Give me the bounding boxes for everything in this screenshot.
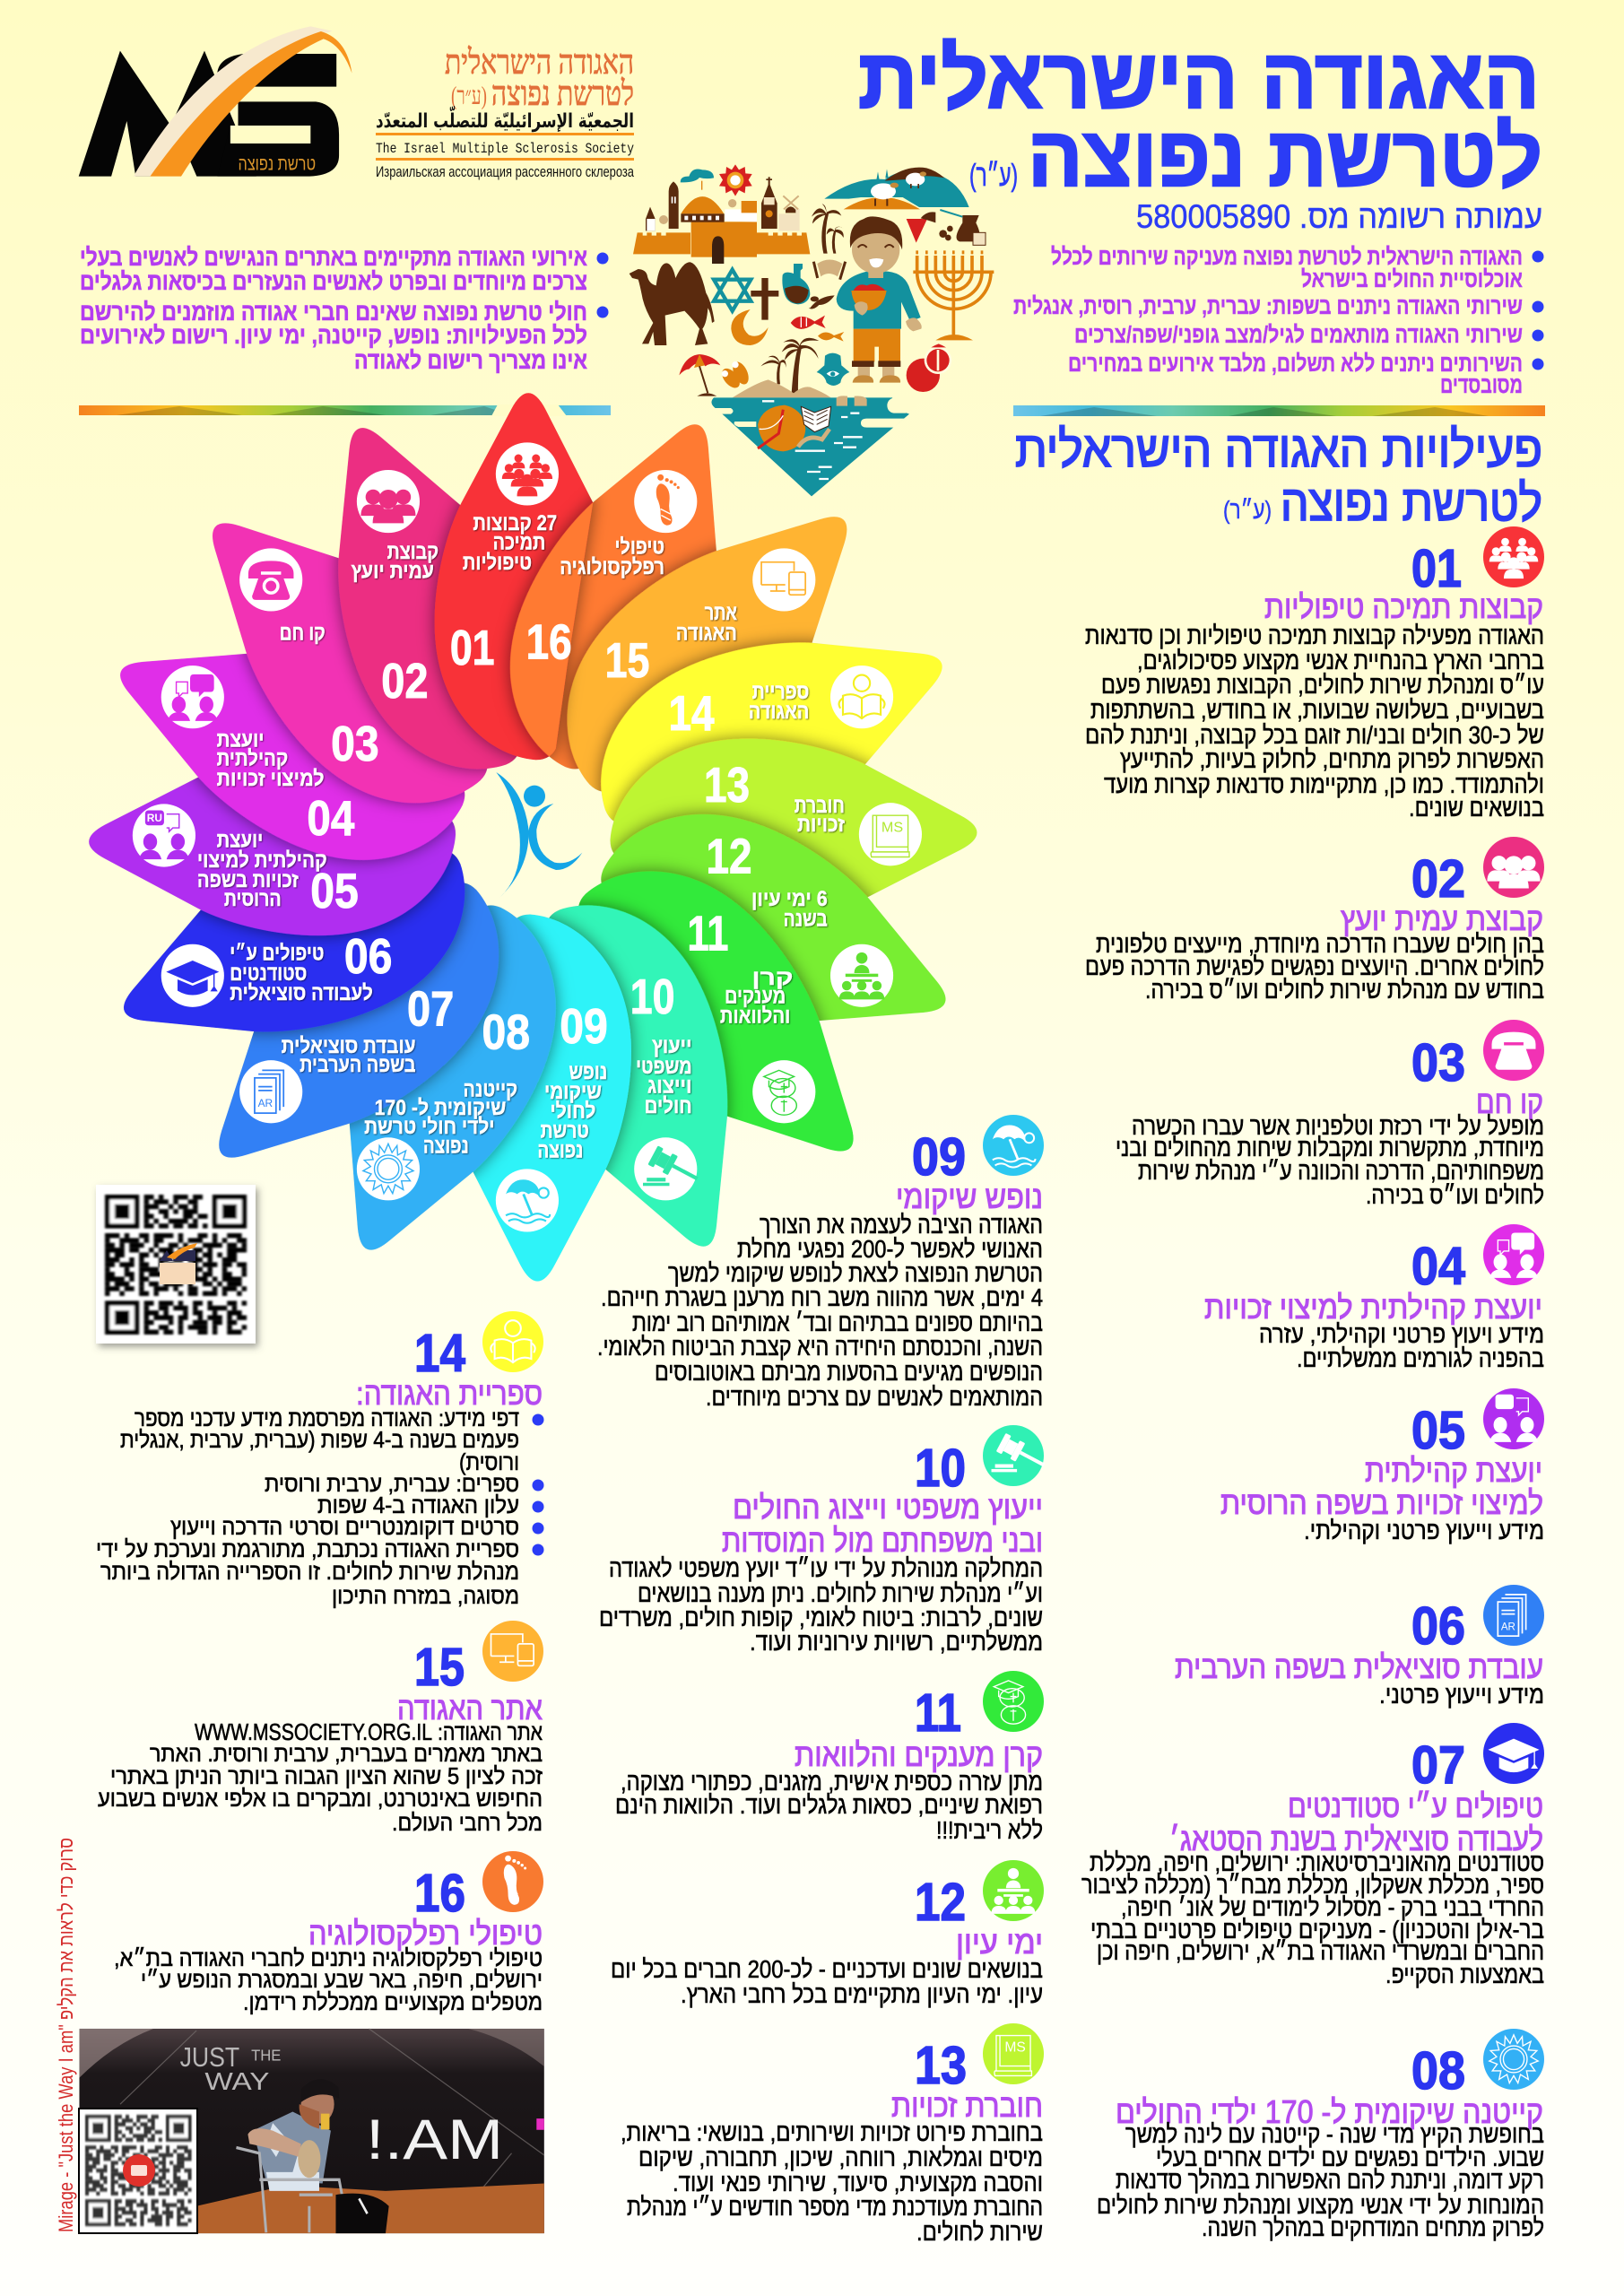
petal numbers: 02 [381, 653, 429, 709]
item 10 [599, 1425, 1049, 1656]
petal labels: מענקים [725, 984, 786, 1007]
text 15: באתר מאמרים בעברית, ערבית ורוסית. האתר [150, 1740, 543, 1767]
text 03 [1116, 1112, 1544, 1209]
activities heading: (ע״ר) [1223, 496, 1272, 524]
heading 08: קייטנה שיקומית ל- 170 ילדי החולים [1116, 2093, 1543, 2130]
text 13: והסבה מקצועית, סיעוד, שירותי פנאי ועוד. [673, 2169, 1043, 2196]
text 09: השנה, והכנסתם היחידה היא קצבת הביטוח הלאומי. [597, 1333, 1043, 1361]
petal labels: חולים [645, 1094, 692, 1118]
petal numbers: 06 [344, 928, 392, 984]
left intro bullets [80, 244, 608, 374]
number 15: 15 [414, 1638, 465, 1697]
MS logo: טרשת נפוצה [239, 154, 316, 174]
item 02 [1085, 837, 1544, 1004]
text 07: סטודנטים מהאוניברסיטאות: ירושלים, חיפה, מכללת [1090, 1848, 1544, 1876]
petal numbers: 03 [331, 716, 379, 771]
item 03 [1116, 1020, 1544, 1209]
petal labels: עובדת סוציאלית [282, 1034, 416, 1057]
text 10: ממשלתיים, רשויות עירוניות ועוד. [750, 1628, 1043, 1656]
petal numbers: 13 [704, 757, 750, 813]
petal labels: טיפוליות [463, 551, 532, 574]
activities heading [1015, 421, 1542, 531]
petal numbers: 05 [310, 863, 359, 918]
text 03: לחולים ועו״ס בכירה. [1366, 1181, 1544, 1209]
number 04: 04 [1411, 1237, 1465, 1296]
QR code: society [96, 1185, 256, 1344]
petal 11 [575, 860, 854, 1152]
photo text: JUST [180, 2042, 239, 2073]
text 02: בחודש עם מנהלת שירות לחולים ועו״ס בכירה. [1145, 976, 1544, 1004]
heading 06: עובדת סוציאלית בשפה הערבית [1175, 1648, 1543, 1685]
petal numbers: 08 [482, 1004, 530, 1059]
text 08: בחופשת הקיץ מדי שנה - קייטנה עם לינה למשך [1125, 2120, 1544, 2148]
petal labels: קהילתית למיצוי [197, 848, 327, 872]
heading 01: קבוצות תמיכה טיפוליות [1264, 588, 1543, 625]
heading 16: טיפולי רפלקסולוגיה [308, 1915, 543, 1952]
petal labels: טיפולים ע״י [230, 942, 324, 965]
number 03: 03 [1411, 1033, 1465, 1092]
text 09: האגודה הציבה לעצמה את הצורך [760, 1211, 1043, 1239]
wheelchair user [236, 2079, 389, 2233]
text 09: המותאמים לאנשים עם צרכים מיוחדים. [706, 1383, 1043, 1411]
text 09: הנופשים מגיעים בהסעות מביתם באוטובוסים [655, 1358, 1043, 1386]
icon: star, cross, crescent [714, 270, 778, 345]
text 16: מטפלים מקצועיים ממכללת רידמן. [243, 1988, 543, 2015]
heading 07: לעבודה סוציאלית בשנת הסטאג׳ [1169, 1821, 1543, 1857]
petal 13 [610, 739, 977, 897]
number 09: 09 [912, 1127, 966, 1187]
title: האגודה הישראלית [858, 31, 1540, 126]
icon: seminar [983, 1860, 1044, 1921]
text 02 [1085, 930, 1544, 1004]
number 07: 07 [1411, 1735, 1465, 1795]
heading 05 [1220, 1452, 1543, 1521]
petal 07 [177, 849, 548, 1221]
petal 12 [597, 803, 946, 1026]
left rainbow bar [79, 404, 611, 416]
photo text: THE [251, 2047, 281, 2065]
petal numbers: 10 [630, 969, 674, 1024]
icon: documents AR [1483, 1585, 1544, 1646]
title [858, 31, 1542, 204]
right intro bullets: שירותי האגודה מותאמים לגיל/מצב גופני/שפה/צרכים [1074, 321, 1523, 348]
icon: grapes and coffee [907, 210, 986, 245]
heading 10: ייעוץ משפטי וייצוג החולים [733, 1489, 1043, 1526]
petal labels: עמית יועץ [351, 560, 434, 583]
text 01: בנושאים שונים. [1409, 794, 1544, 822]
petal labels: נפוצה [537, 1139, 583, 1162]
heading 03: קו חם [1476, 1083, 1543, 1120]
text 04 [1259, 1320, 1544, 1372]
list 14: סרטים דוקומנטריים וסרטי הדרכה וייעוץ [170, 1513, 519, 1540]
photo text: WAY [204, 2067, 269, 2096]
petal numbers [307, 613, 752, 1059]
icon: hills and sheep [824, 168, 969, 209]
petal labels: האגודה [749, 700, 809, 723]
icon: sun and cloud [681, 164, 752, 196]
icon: sun [1483, 2029, 1544, 2090]
heading 09: נופש שיקומי [896, 1178, 1043, 1215]
icon: graduation cap [1483, 1723, 1544, 1784]
text 01: ולהתמודד. כמו כן, מתקיימות סדנאות קצרות מועד [1104, 770, 1544, 798]
petal labels: טיפולי [615, 535, 664, 559]
text 02: לחולים אחרים. היועצים נפגשים לפגישת הדרכה פעם [1085, 952, 1544, 980]
icon: foot [482, 1851, 543, 1912]
text 15 [98, 1718, 543, 1836]
petal labels: ילדי חולי טרשת [364, 1115, 495, 1138]
list 14 [96, 1405, 543, 1609]
petal numbers: 09 [560, 998, 608, 1054]
text 01: עו״ס ומנהלת שירות לחולים, הקבוצות נפגשות פעם [1101, 671, 1544, 699]
text 03: מיוחדת, מתקשרות ומקבלות שיחות מהחולים ובני [1116, 1134, 1544, 1161]
petal 14 [590, 631, 942, 827]
petal 10 [544, 894, 739, 1247]
number 06: 06 [1411, 1596, 1465, 1656]
petal labels: לעבודה סוציאלית [230, 981, 373, 1004]
petal 06 [100, 812, 499, 1098]
item 07 [1081, 1723, 1544, 1988]
petal labels: תמיכה [493, 531, 545, 554]
icon: scholarship dollar [983, 1671, 1044, 1732]
text 01: האפשרות לפרוק מתחים, לחלוק בעיות, להתייעץ [1120, 745, 1544, 773]
right intro bullets [1013, 243, 1544, 398]
text 05: מידע וייעוץ פרטני וקהילתי. [1304, 1517, 1544, 1544]
number 14: 14 [414, 1324, 465, 1383]
registration number: עמותה רשומה מס. 580005890 [1136, 198, 1542, 235]
petal labels: אתר [705, 601, 737, 624]
petal labels: בשנה [784, 907, 828, 930]
number 01: 01 [1411, 539, 1462, 598]
petal icons [133, 442, 922, 1232]
text 02: בהן חולים שעברו הדרכה מיוחדת, מייעצים טלפונית [1096, 930, 1544, 958]
logo wordmark: האגודה הישראלית [445, 44, 634, 82]
icon: pomegranate [907, 344, 951, 392]
activities heading: פעילויות האגודה הישראלית [1015, 421, 1542, 477]
text 10: וע״י מנהלת שירות לחולים. ניתן מענה בנושאים [638, 1579, 1043, 1607]
list 14: ספריית האגודה נכתבת, מתורגמת ונערכת על ידי [96, 1535, 519, 1562]
text 08: המונחות על ידי אנשי מקצוע ומנהלת שירות לחולים [1097, 2191, 1544, 2219]
text 15: מכל רחבי העולם. [392, 1809, 543, 1836]
item 13 [621, 2023, 1044, 2246]
number 08: 08 [1411, 2041, 1465, 2100]
icon: center person logo [496, 772, 582, 898]
text 13: בחוברת פירוט זכויות ושירותים, בנושאי: בריאות, [621, 2118, 1043, 2146]
petal 02 [272, 404, 559, 804]
left intro bullets: צרכים מיוחדים ובפרט לאנשים הנעזרים בכיסאות גלגלים [80, 268, 587, 295]
text 11: ללא ריבית!!! [936, 1816, 1043, 1844]
icon: beach [983, 1115, 1044, 1176]
icon: menorah [913, 250, 994, 340]
petal 09 [473, 915, 631, 1282]
petal labels: הרוסית [224, 887, 282, 910]
text 09: האנושי לאפשר ל-200 נפגעי מחלת [737, 1235, 1043, 1263]
text 13: שירות לחולים. [916, 2218, 1043, 2246]
petal 15 [558, 517, 847, 796]
icon: phone [1483, 1020, 1544, 1081]
text 08: שבוע. הילדים נפגשים עם ילדים אחרים בעלי [1156, 2144, 1544, 2171]
item 16 [114, 1851, 543, 2015]
icon: camel [630, 262, 715, 345]
petal labels: והלוואות [720, 1004, 790, 1028]
text 13: מיסים וגמלאות, רווחה, שיכון, תחבורה, שיקום [638, 2144, 1043, 2171]
number 13: 13 [915, 2036, 967, 2095]
heading 07 [1169, 1787, 1543, 1857]
petal labels: קייטנה [463, 1077, 517, 1100]
list 14: ורוסית) [459, 1448, 519, 1475]
text 07 [1081, 1848, 1544, 1988]
left intro bullets: חולי טרשת נפוצה שאינם חברי אגודה מוזמנים להירשם [80, 299, 587, 326]
petal labels: בשפה הערבית [300, 1053, 416, 1076]
heading 07: טיפולים ע״י סטודנטים [1288, 1787, 1543, 1824]
left intro bullets: אינו מצריך רישום לאגודה [354, 347, 587, 374]
text 16: טיפולי רפלקסולוגיה ניתנים לחברי האגודה בת״א, [114, 1944, 543, 1971]
petal labels: האגודה [676, 621, 737, 644]
petal numbers: 11 [688, 906, 728, 961]
heading 13: חוברת זכויות [891, 2087, 1043, 2124]
item 15 [98, 1621, 543, 1836]
text 09: 4 ימים, אשר מהווה משב רוח מרענן בשגרת חייהם. [601, 1283, 1043, 1311]
petal labels: למיצוי זכויות [217, 767, 324, 790]
heading 10: ובני משפחתם מול המוסדות [722, 1522, 1043, 1559]
list 14: דפי מידע: האגודה מפרסמת מידע עדכני מספר [135, 1405, 519, 1431]
icon: boy with basket [837, 216, 922, 383]
petal numbers: 01 [450, 620, 495, 675]
logo wordmark: לטרשת נפוצה [491, 75, 634, 113]
right intro bullets: האגודה הישראלית לטרשת נפוצה מעניקה שירותים לכלל [1051, 243, 1523, 270]
text 10 [599, 1554, 1043, 1656]
text 12: בנושאים שונים ועדכניים - לכ-200 חברים בכל יום [611, 1955, 1043, 1983]
heading 14: ספריית האגודה: [356, 1375, 543, 1412]
petal 05 [89, 777, 456, 935]
icon: sea with reader [711, 379, 924, 496]
text 03: מופעל על ידי רכזת וטלפניות אשר עברו הכשרה [1132, 1112, 1544, 1140]
petals [85, 389, 981, 1285]
list 14: פעמים בשנה ב-4 שפות (עברית, ערבית ,אנגלית [120, 1426, 519, 1453]
list 14: עלון האגודה ב-4 שפות [317, 1492, 519, 1518]
logo wordmark: (ע״ר) [451, 83, 487, 110]
icon: reader [482, 1311, 543, 1372]
heading 04: יועצת קהילתית למיצוי זכויות [1204, 1289, 1542, 1326]
text 01: של כ-30 חולים ובני/ות זוגם בכל קבוצה, וניתנת להם [1085, 721, 1544, 749]
title: לטרשת נפוצה [1028, 109, 1542, 204]
icon: gavel [983, 1425, 1049, 1486]
activities heading: לטרשת נפוצה [1281, 474, 1542, 531]
text 10: שונים, לרבות: ביטוח לאומי, קופות חולים, משרדים [599, 1604, 1043, 1631]
text 01: האגודה מפעילה קבוצות תמיכה טיפוליות וכן סדנאות [1085, 622, 1544, 649]
icon: umbrella and sandals [679, 354, 751, 396]
petal labels: ספריית [752, 680, 809, 703]
item 09 [597, 1115, 1044, 1411]
heading 05: למיצוי זכויות בשפה הרוסית [1220, 1484, 1543, 1521]
illustration: heart of Israel icons [630, 164, 994, 496]
right intro bullets: השירותים ניתנים ללא תשלום, מלבד אירועים במחירים [1068, 350, 1523, 377]
right intro bullets: שירותי האגודה ניתנים בשפות: עברית, ערבית, רוסית, אנגלית [1013, 292, 1523, 319]
vertical scan caption: סרוק כדי לראות את הקליפ ‎Mirage - "Just the Way I am"‎ [55, 1838, 77, 2232]
list 14: ספרים: עברית, ערבית ורוסית [265, 1470, 519, 1497]
number 12: 12 [915, 1873, 966, 1932]
icon: hamsa [817, 353, 849, 386]
petal labels: רפלקסולוגיה [560, 555, 664, 578]
petal labels: חוברת [795, 794, 845, 817]
petal labels: קהילתית [217, 747, 288, 770]
petal labels: שיקומית ל- 170 [375, 1096, 506, 1119]
text 04: מידע ויעוץ פרטני וקהילתי, עזרה [1259, 1320, 1544, 1348]
petal labels: לחולי [550, 1100, 595, 1123]
item 06 [1175, 1585, 1544, 1709]
petal numbers: 14 [668, 685, 715, 741]
petal labels: משפטי [636, 1055, 692, 1078]
icon: jug, scroll, olive, fish [782, 259, 846, 342]
number 16: 16 [414, 1864, 465, 1923]
petal numbers: 15 [605, 632, 649, 688]
text 01: בשבועיים, בשלושה שבועות, או בחודש, בהשתתפות [1090, 696, 1544, 724]
icon: rights booklet [983, 2023, 1044, 2084]
item 08 [1097, 2029, 1544, 2241]
petal labels: קבוצת [387, 540, 439, 563]
text 12 [611, 1955, 1043, 2008]
heading 12: ימי עיון [956, 1924, 1043, 1961]
text 08: רקע דומה, וניתנת להם האפשרות במהלך סדנאות [1116, 2166, 1544, 2194]
petal labels: שיקומי [544, 1080, 602, 1103]
petal labels: ייעוץ [652, 1034, 692, 1057]
list 14: מסוגה, במזרח התיכון [332, 1582, 519, 1609]
QR code: clip [79, 2109, 197, 2233]
text 10: המחלקה מנוהלת על ידי עו״ד יועץ משפטי לאגודה [609, 1554, 1043, 1582]
icon: people [1483, 837, 1544, 898]
text 08: לפרוק מתחים המודחקים במהלך השנה. [1202, 2213, 1544, 2241]
photo text: !.AM [366, 2108, 503, 2171]
clip photo [79, 2029, 544, 2233]
petal numbers: 12 [707, 829, 752, 884]
petal 01 [435, 393, 593, 760]
petal labels: יועצת [217, 728, 265, 752]
heading 10 [722, 1489, 1043, 1559]
logo wordmark [376, 44, 634, 180]
text 06: מידע וייעוץ פרטני. [1379, 1681, 1544, 1709]
petal labels: נפוצה [423, 1134, 469, 1157]
logo wordmark: الجمعيّة الإسرائيليّة للتصلّب المتعدّد [376, 106, 634, 133]
text 11: רפואת שיניים, כסאות גלגלים ועוד. הלוואות הינם [615, 1791, 1043, 1819]
petal 16 [543, 424, 721, 773]
text 12: עיון. ימי העיון מתקיימים בכל רחבי הארץ. [681, 1980, 1043, 2008]
text 09: בהיותם ספונים בבתיהם ובד׳ אמותיהם רוב ימות [632, 1309, 1043, 1336]
heading 15: אתר האגודה [397, 1690, 543, 1726]
text 15: אתר האגודה: WWW.MSSOCIETY.ORG.IL [195, 1718, 543, 1745]
text 13: החוברת מעודכנת מדי מספר חודשים ע״י מנהלת [627, 2193, 1043, 2221]
text 09: הטרשת הנפוצה לצאת לנופש שיקומי למשך [668, 1259, 1043, 1287]
logo wordmark: The Israel Multiple Sclerosis Society [376, 141, 634, 157]
petal labels: זכויות בשפה [197, 868, 299, 891]
icon: devices [482, 1621, 543, 1682]
petal labels: 27 קבוצות [473, 511, 557, 535]
icon: chat [1483, 1224, 1544, 1285]
number 05: 05 [1411, 1401, 1465, 1460]
petal numbers: 16 [526, 613, 572, 669]
text 15: זכה לציון 5 שהוא הציון הגבוה ביותר הניתן באתרי [110, 1762, 543, 1789]
petal labels: נופש [569, 1060, 607, 1083]
flower diagram [85, 389, 981, 1285]
title: (ע״ר) [969, 159, 1018, 193]
text 16 [114, 1944, 543, 2015]
text 07: באמצעות הסקייפ. [1385, 1961, 1544, 1988]
text 11 [615, 1768, 1043, 1844]
photo text [180, 2042, 503, 2171]
petal labels [197, 511, 845, 1162]
icon: palm trees [760, 204, 845, 393]
icon: groups [1483, 526, 1544, 587]
icon: old city [633, 177, 810, 264]
text 11: מתן עזרה כספית אישית, מזגנים, כפתורי מצוקה, [621, 1768, 1043, 1796]
text 01: ברחבי הארץ בהנחיית אנשי מקצוע פסיכולוגים, [1137, 647, 1544, 674]
text 15: החיפוש באינטרנט, ומבקרים בו אלפי אנשים בשבוע [98, 1785, 543, 1812]
petal 04 [85, 612, 484, 899]
petal labels: קו חם [280, 621, 326, 644]
text 07: החרדי בבני ברק - מסלול לימודים של אונ׳ חיפה, [1121, 1893, 1544, 1921]
item 14 [96, 1311, 543, 1609]
petal 03 [150, 481, 521, 852]
text 03: משפחותיהם, הדרכה והכוונה ע״י מנהלת שירות [1138, 1157, 1544, 1185]
petal numbers: 04 [307, 790, 355, 846]
icon: RU chat [1483, 1388, 1544, 1449]
petal labels: זכויות [797, 813, 845, 836]
text 01 [1085, 622, 1544, 822]
petal labels: יועצת [217, 828, 263, 851]
item 12 [611, 1860, 1044, 2008]
list 14: מנהלת שירות לחולים. זו הספרייה הגדולה ביותר [100, 1558, 519, 1585]
petal labels: טרשת [541, 1118, 589, 1142]
logo wordmark: Израильская ассоциация рассеянного склероза [376, 163, 634, 180]
right intro bullets: אוכלוסיית החולים בישראל [1301, 265, 1523, 292]
text 07: החברים ובמשרדי האגודה בת״א, ירושלים, חיפה וכן [1097, 1937, 1544, 1965]
text 04: בהפניה לגורמים ממשלתיים. [1297, 1344, 1544, 1372]
text 07: בר-אילן והטכניון) - מעניקים טיפולים פרטניים בבתי [1090, 1916, 1544, 1944]
text 13 [621, 2118, 1043, 2246]
petal numbers: 07 [407, 980, 454, 1036]
MS logo [79, 26, 352, 177]
petal 08 [344, 902, 567, 1250]
right rainbow bar [1013, 405, 1545, 416]
left intro bullets: אירועי האגודה מתקיימים באתרים הנגישים לאנשים בעלי [80, 244, 587, 271]
petal labels: סטודנטים [230, 961, 307, 985]
petal labels: וייצוג [647, 1074, 692, 1098]
item 04 [1204, 1224, 1544, 1372]
heading 02: קבוצת עמית יועץ [1341, 900, 1543, 937]
item 01 [1085, 526, 1544, 822]
number 10: 10 [915, 1439, 966, 1498]
text 08 [1097, 2120, 1544, 2241]
right intro bullets: מסובסדים [1440, 371, 1523, 398]
number 11: 11 [915, 1683, 961, 1743]
left intro bullets: לכל הפעילויות: נופש, קייטנה, ימי עיון. רישום לאירועים [80, 322, 587, 349]
item 05 [1220, 1388, 1544, 1544]
text 09 [597, 1211, 1043, 1411]
text 16: ירושלים, חיפה, באר שבע ובמסגרת הנופש ע״י [141, 1966, 543, 1993]
petal labels: 6 ימי עיון [751, 887, 828, 910]
heading 11: קרן מענקים והלוואות [795, 1736, 1043, 1773]
number 02: 02 [1411, 849, 1465, 909]
heading 05: יועצת קהילתית [1365, 1452, 1542, 1489]
text 07: ספיר, מכללת אשקלון, מכללת מבח״ר (מכללה לציבור [1081, 1871, 1544, 1899]
petal labels: קרן [752, 966, 793, 989]
item 11 [615, 1671, 1044, 1844]
